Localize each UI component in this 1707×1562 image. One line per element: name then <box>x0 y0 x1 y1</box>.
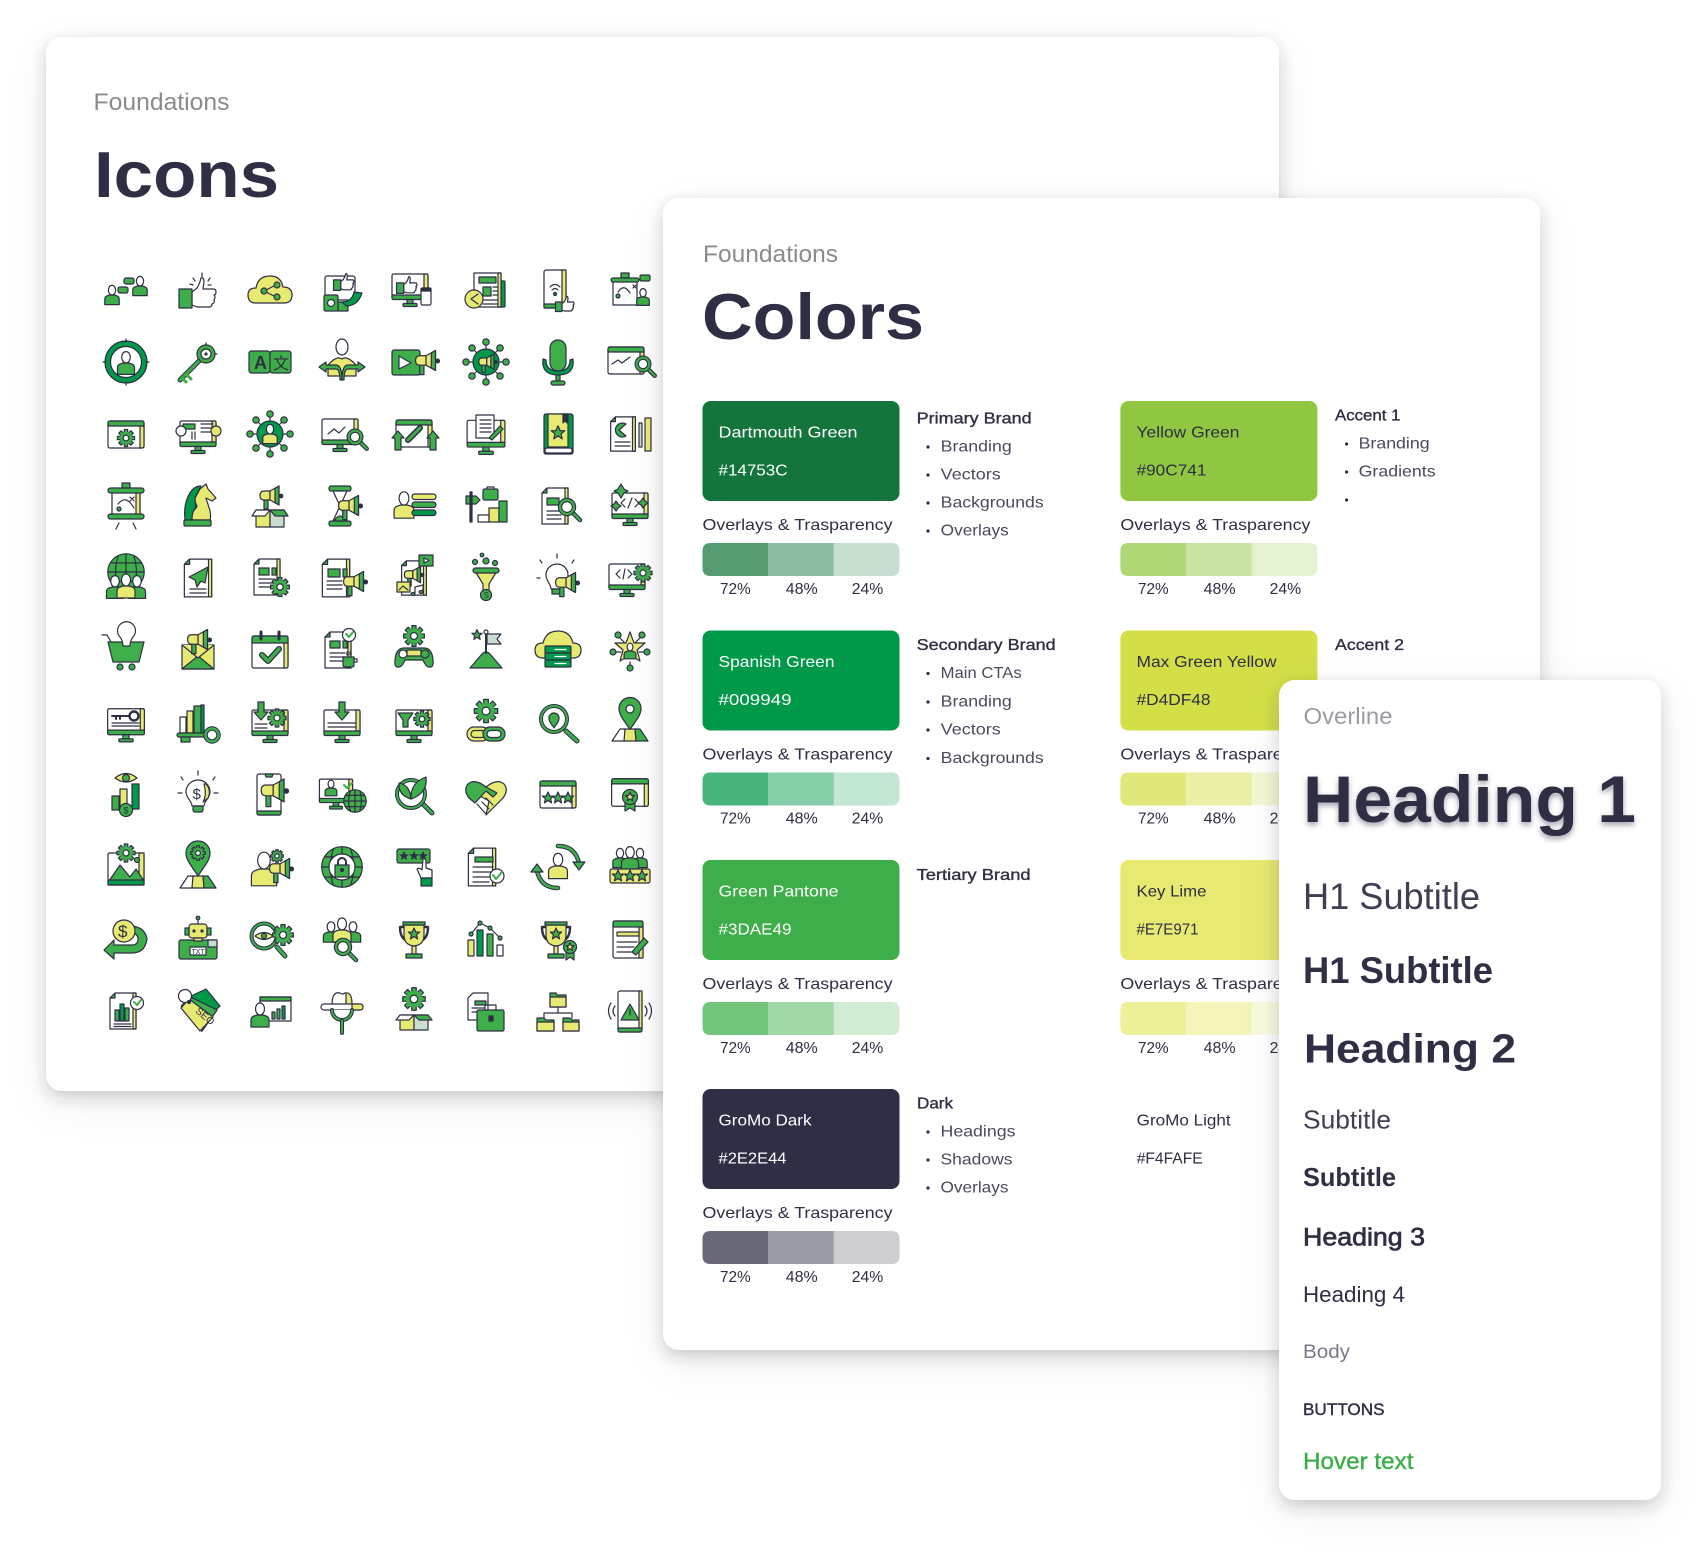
swatch group: Dartmouth Green: 24% <box>852 581 883 598</box>
swatch group: Key Lime: Overlays & Trasparency <box>1120 976 1310 993</box>
icon: video megaphone <box>392 350 439 375</box>
icon: documents briefcase <box>468 993 504 1031</box>
type sample: Subtitle bold: Subtitle <box>1303 1162 1396 1192</box>
usage list: Secondary Brand: Main CTAs <box>941 665 1022 682</box>
icon: document chart check <box>110 993 144 1029</box>
swatch group: Max Green Yellow: Overlays & Trasparency <box>1120 747 1310 764</box>
overline: Foundations: Foundations <box>94 89 230 116</box>
icon: eye magnifier gear <box>252 924 293 956</box>
swatch group: Yellow Green: 48% <box>1204 581 1236 598</box>
icon: monitor thumbs up <box>392 274 431 306</box>
icon: document check coffee <box>325 628 357 668</box>
heading: Icons: Icons <box>94 138 279 211</box>
icon: team search <box>323 918 361 960</box>
icon: translate <box>249 351 291 373</box>
usage list: Dark: Shadows <box>940 1152 1012 1169</box>
icon: image gear <box>108 844 144 885</box>
icon: news share <box>465 273 505 308</box>
swatch group: Max Green Yellow: 24% <box>1270 811 1301 828</box>
icon: translate: 文 <box>273 355 289 373</box>
usage list: Accent 1 <box>1335 408 1436 502</box>
icon: social like with bird <box>324 274 362 311</box>
icon: monitor download gear <box>252 702 288 742</box>
icon: leaf magnifier <box>397 777 432 813</box>
icon: eye bars dollar: $ <box>124 806 129 816</box>
icon: online meeting globe <box>319 779 366 812</box>
panel: typography <box>1279 680 1661 1500</box>
icon: eye bars dollar <box>112 774 139 816</box>
swatch group: Yellow Green: Yellow Green <box>1136 425 1240 442</box>
usage list: Dark: Headings <box>940 1124 1016 1141</box>
swatch label: GroMo Light <box>1137 1113 1231 1168</box>
usage list: Accent 1: Accent 1 <box>1335 408 1401 425</box>
swatch label: GroMo Light: #F4FAFE <box>1137 1151 1203 1168</box>
icon: document megaphone ruler <box>611 417 651 451</box>
swatch group: GroMo Dark: #2E2E44 <box>718 1151 787 1168</box>
usage list: Secondary Brand: Vectors <box>941 722 1001 739</box>
type sample: Heading 4: Heading 4 <box>1303 1282 1405 1307</box>
panel: colors <box>663 198 1540 1350</box>
usage list: Primary Brand: Vectors <box>941 467 1001 484</box>
usage list: Secondary Brand: Branding <box>941 694 1012 711</box>
icon: microphone <box>543 340 573 385</box>
usage heading: Tertiary Brand: Tertiary Brand <box>917 867 1031 884</box>
usage list: Primary Brand: Branding <box>941 439 1012 456</box>
icon: key <box>180 343 217 382</box>
icon: growth chart key <box>177 705 218 742</box>
icon: translate: A <box>254 353 267 373</box>
icon: person with bars <box>394 492 436 518</box>
icon: monitor code gear <box>609 564 652 596</box>
icon: trophy <box>400 922 428 958</box>
icon: bulb megaphone <box>537 554 579 597</box>
icon: globe lock <box>322 847 362 887</box>
icon: funnel dollar: S <box>484 591 489 600</box>
icons card background <box>46 37 1279 1091</box>
swatch group: Green Pantone: #3DAE49 <box>718 922 792 939</box>
swatch group: Spanish Green: Overlays & Trasparency <box>702 747 892 764</box>
icon: book star <box>544 414 573 454</box>
swatch group: Spanish Green: Spanish Green <box>718 654 834 671</box>
usage list: Dark: Overlays <box>940 1180 1008 1197</box>
swatch group: Yellow Green: 72% <box>1138 581 1169 598</box>
swatch group: GroMo Dark: GroMo Dark <box>718 1113 813 1130</box>
swatch group: Yellow Green: Overlays & Trasparency <box>1120 517 1310 534</box>
typography card background <box>1279 680 1661 1500</box>
icon: phone alert <box>608 991 652 1032</box>
icon: people talking <box>105 276 147 305</box>
usage list: Dark: Dark <box>917 1096 954 1113</box>
type sample: Hover text: Hover text <box>1303 1448 1414 1474</box>
icon: link arrows window <box>392 420 439 450</box>
swatch group: GroMo Dark <box>702 1089 900 1286</box>
icon: document check <box>468 848 504 886</box>
icon: person cycle arrows <box>531 846 585 888</box>
swatch group: GroMo Dark: 72% <box>720 1269 751 1286</box>
swatch group: Key Lime <box>1120 860 1317 1057</box>
icon: dollar return <box>104 920 147 959</box>
swatch group: Dartmouth Green: #14753C <box>718 463 788 480</box>
swatch group: Dartmouth Green: Dartmouth Green <box>718 425 858 442</box>
icon: trophy badge <box>542 922 576 960</box>
swatch group: Dartmouth Green: Overlays & Trasparency <box>702 517 892 534</box>
icon: dollar return: $ <box>118 922 128 941</box>
icon: presentation board <box>108 483 144 529</box>
icon: hub person <box>247 411 293 457</box>
icon: rating hand <box>397 849 432 886</box>
type sample: Body: Body <box>1303 1342 1351 1363</box>
swatch group: Max Green Yellow: Max Green Yellow <box>1136 654 1277 671</box>
swatch group: Green Pantone: 72% <box>720 1040 751 1057</box>
icon: window three stars <box>540 781 576 808</box>
type sample: H1 Subtitle bold: H1 Subtitle <box>1303 950 1493 991</box>
icon: document gear <box>254 559 289 596</box>
icon: SEO tag: SEO <box>193 1006 216 1028</box>
swatch group: Dartmouth Green <box>702 401 900 598</box>
type sample: H1 Subtitle light: H1 Subtitle <box>1303 876 1480 917</box>
icon: reader with arrows <box>319 339 365 380</box>
icon: robot text: TXT <box>192 949 205 956</box>
icon: monitor download <box>324 702 360 742</box>
icon: document magnifier <box>542 488 580 524</box>
usage list: Primary Brand: Primary Brand <box>917 411 1032 428</box>
icon: window chart magnifier <box>608 347 655 376</box>
panel: icons <box>46 37 1279 1091</box>
swatch group: Green Pantone <box>702 860 900 1057</box>
icon: mountain flag star <box>470 630 502 668</box>
swatch group: GroMo Dark: 24% <box>852 1269 883 1286</box>
icon: monitor comparison <box>176 421 221 454</box>
type sample: Heading 1: Heading 1 <box>1303 762 1636 836</box>
icon: monitor key <box>108 709 144 742</box>
swatch group: Green Pantone: Green Pantone <box>718 884 839 901</box>
icon: folder tree <box>537 993 579 1031</box>
usage list: Dark <box>917 1096 1016 1197</box>
icon: thumbs up <box>179 273 216 308</box>
type sample: Overline: Overline <box>1304 703 1392 729</box>
icon: star person nodes <box>610 632 650 671</box>
icon: monitor code sparkle <box>611 484 648 526</box>
type sample: Heading 2: Heading 2 <box>1304 1026 1516 1072</box>
icon: bar chart trend <box>468 921 503 956</box>
swatch group: GroMo Dark: Overlays & Trasparency <box>702 1205 892 1222</box>
icon: pin gear map <box>180 841 216 888</box>
icon: team three stars <box>610 847 650 883</box>
icon: dollar bulb <box>178 771 218 812</box>
icon: shopping cart idea <box>102 622 144 670</box>
usage list: Secondary Brand: Backgrounds <box>941 750 1044 767</box>
icon: document window pencil <box>613 921 648 958</box>
icon: map pin <box>612 698 648 741</box>
icon: location search <box>541 706 577 741</box>
usage list: Primary Brand <box>917 411 1044 540</box>
usage heading: Accent 2: Accent 2 <box>1335 637 1404 654</box>
swatch group: Max Green Yellow <box>1120 630 1317 828</box>
swatch label: GroMo Light: GroMo Light <box>1137 1113 1231 1130</box>
icon: cloud share <box>248 276 292 303</box>
icon: target person <box>103 339 149 385</box>
swatch group: Dartmouth Green: 48% <box>786 581 818 598</box>
icon: robot text <box>179 916 217 959</box>
usage list: Accent 1: Gradients <box>1359 464 1436 481</box>
icon: phone megaphone <box>257 774 289 815</box>
usage list: Primary Brand: Backgrounds <box>941 495 1044 512</box>
swatch group: Yellow Green: #90C741 <box>1136 463 1207 480</box>
icon: hub megaphone <box>463 339 509 385</box>
swatch group: Key Lime: 48% <box>1204 1040 1236 1057</box>
icon: calendar check <box>252 632 288 668</box>
icon: hat magnifier <box>321 993 363 1033</box>
icon: hourglass megaphone <box>329 486 362 526</box>
colors card background <box>663 198 1540 1350</box>
swatch group: Key Lime: Key Lime <box>1136 884 1207 901</box>
icon: cloud server <box>535 631 581 667</box>
icon: window gear <box>108 421 144 448</box>
icon: monitor document pencil <box>467 415 505 454</box>
icon: gear chain <box>467 699 505 741</box>
icon: SEO tag <box>178 989 220 1032</box>
icon: globe people <box>106 554 146 598</box>
type sample: Buttons: BUTTONS <box>1303 1400 1384 1419</box>
icon grid <box>102 270 655 1033</box>
usage list: Primary Brand: Overlays <box>941 523 1009 540</box>
icon: person gear megaphone <box>251 850 293 886</box>
swatch group: Green Pantone: 48% <box>786 1040 818 1057</box>
swatch group: Max Green Yellow: 72% <box>1138 811 1169 828</box>
swatch group: Spanish Green: #009949 <box>718 692 792 709</box>
swatch group: Spanish Green: 48% <box>786 811 818 828</box>
icon: signpost career <box>466 487 507 522</box>
swatch group: Yellow Green <box>1120 401 1317 598</box>
icon: funnel dollar <box>472 553 499 600</box>
swatch group: GroMo Dark: 48% <box>786 1269 818 1286</box>
icon: presenter chart <box>251 997 291 1027</box>
swatch group: Max Green Yellow: #D4DF48 <box>1136 692 1211 709</box>
icon: gamepad gear <box>395 626 433 667</box>
usage list: Secondary Brand: Secondary Brand <box>917 637 1056 654</box>
swatch group: Max Green Yellow: 48% <box>1204 811 1236 828</box>
icon: monitor chart magnifier <box>322 419 367 452</box>
usage list: Secondary Brand <box>917 637 1056 767</box>
usage list: Accent 1: Branding <box>1359 436 1430 453</box>
overline: Foundations: Foundations <box>703 241 838 268</box>
swatch group: Spanish Green: 24% <box>852 811 883 828</box>
swatch group: Green Pantone: Overlays & Trasparency <box>702 976 892 993</box>
icon: box gear <box>396 988 432 1030</box>
icon: phone wifi like <box>544 270 574 312</box>
swatch group: Key Lime: 24% <box>1270 1040 1301 1057</box>
icon: email megaphone <box>182 630 214 669</box>
icon: box megaphone <box>252 486 288 527</box>
swatch group: Spanish Green: 72% <box>720 811 751 828</box>
icon: monitor funnel gear <box>396 710 432 742</box>
icon: document paper plane <box>184 559 212 597</box>
icon: document megaphone <box>322 559 367 597</box>
icon: heart handshake <box>466 782 506 815</box>
swatch group: Key Lime: #E7E971 <box>1136 922 1199 939</box>
icon: media document <box>397 555 433 596</box>
swatch group: Spanish Green <box>702 630 900 828</box>
swatch group: Key Lime: 72% <box>1138 1040 1169 1057</box>
swatch group: Yellow Green: 24% <box>1270 581 1301 598</box>
heading: Colors: Colors <box>702 280 924 353</box>
type sample: Subtitle light: Subtitle <box>1303 1104 1391 1134</box>
swatch group: Green Pantone: 24% <box>852 1040 883 1057</box>
type sample: Heading 3: Heading 3 <box>1303 1224 1425 1252</box>
icon: dollar bulb: $ <box>192 786 202 803</box>
icon: chess knight <box>184 484 216 526</box>
swatch group: Dartmouth Green: 72% <box>720 581 751 598</box>
icon: window badge <box>612 779 648 811</box>
icon: strategy board with person <box>611 273 650 305</box>
